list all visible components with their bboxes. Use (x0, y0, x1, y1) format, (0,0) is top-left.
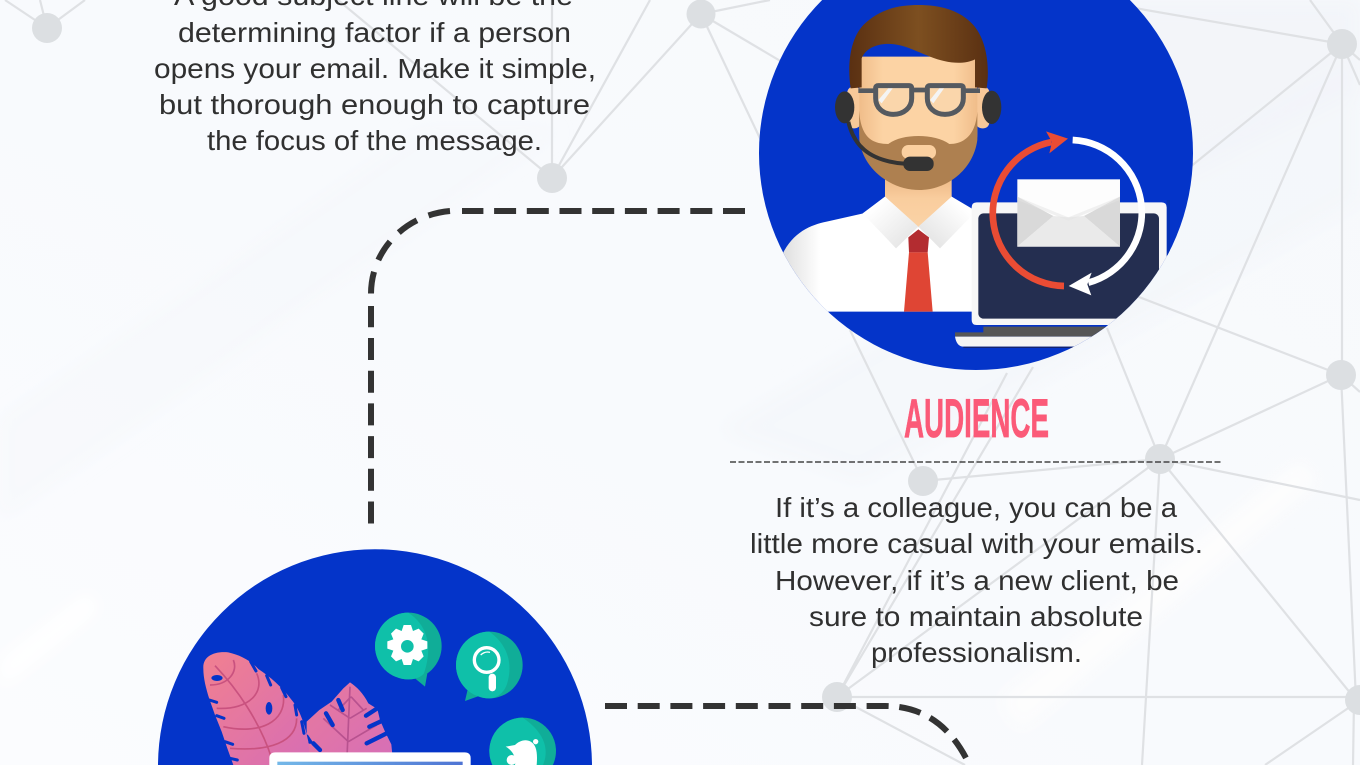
leaf: left (203, 652, 311, 765)
collar (862, 196, 960, 248)
icon: bell bubble (489, 718, 556, 765)
text block: subject line (154, 0, 596, 156)
dashed connector: top (371, 211, 745, 524)
text block: audience: professionalism. (871, 637, 1082, 668)
text block: subject line: but thorough enough to capture (159, 89, 590, 120)
laptop (955, 202, 1167, 348)
text block: audience: If it’s a colleague, you can be a (775, 492, 1177, 523)
text block: audience: little more casual with your emails. (750, 528, 1203, 559)
leaf: right (307, 682, 393, 765)
text block: subject line: opens your email. Make it simple, (154, 53, 596, 84)
text block: audience: sure to maintain absolute (809, 601, 1143, 632)
ears (847, 87, 989, 128)
neck (885, 180, 952, 228)
shirt (780, 197, 980, 312)
heading: audience: AUDIENCE (904, 387, 1049, 449)
text block: audience: However, if it’s a new client, be (775, 565, 1179, 596)
beard (859, 110, 977, 190)
icon: gear bubble (375, 613, 442, 687)
envelope (1017, 179, 1120, 247)
face (859, 56, 978, 144)
divider: dotted rule (730, 461, 1222, 463)
hair (849, 5, 988, 88)
illustration: blue circle with leaves and laptop (158, 549, 592, 765)
dashed connector: bottom (605, 706, 969, 764)
arrow: red arc (993, 131, 1068, 286)
icon: search bubble (456, 632, 523, 701)
headset (835, 91, 1001, 171)
laptop screen (269, 752, 471, 765)
arrow: white arc (1069, 140, 1142, 295)
mouth patch (902, 145, 936, 159)
glasses (858, 86, 980, 114)
text block: subject line: the focus of the message. (207, 125, 542, 156)
tie (904, 229, 933, 312)
text block: subject line: determining factor if a person (178, 17, 571, 48)
icon: support agent circle (759, 0, 1193, 370)
text block: audience (750, 492, 1203, 668)
laptop shadow (1167, 200, 1170, 255)
